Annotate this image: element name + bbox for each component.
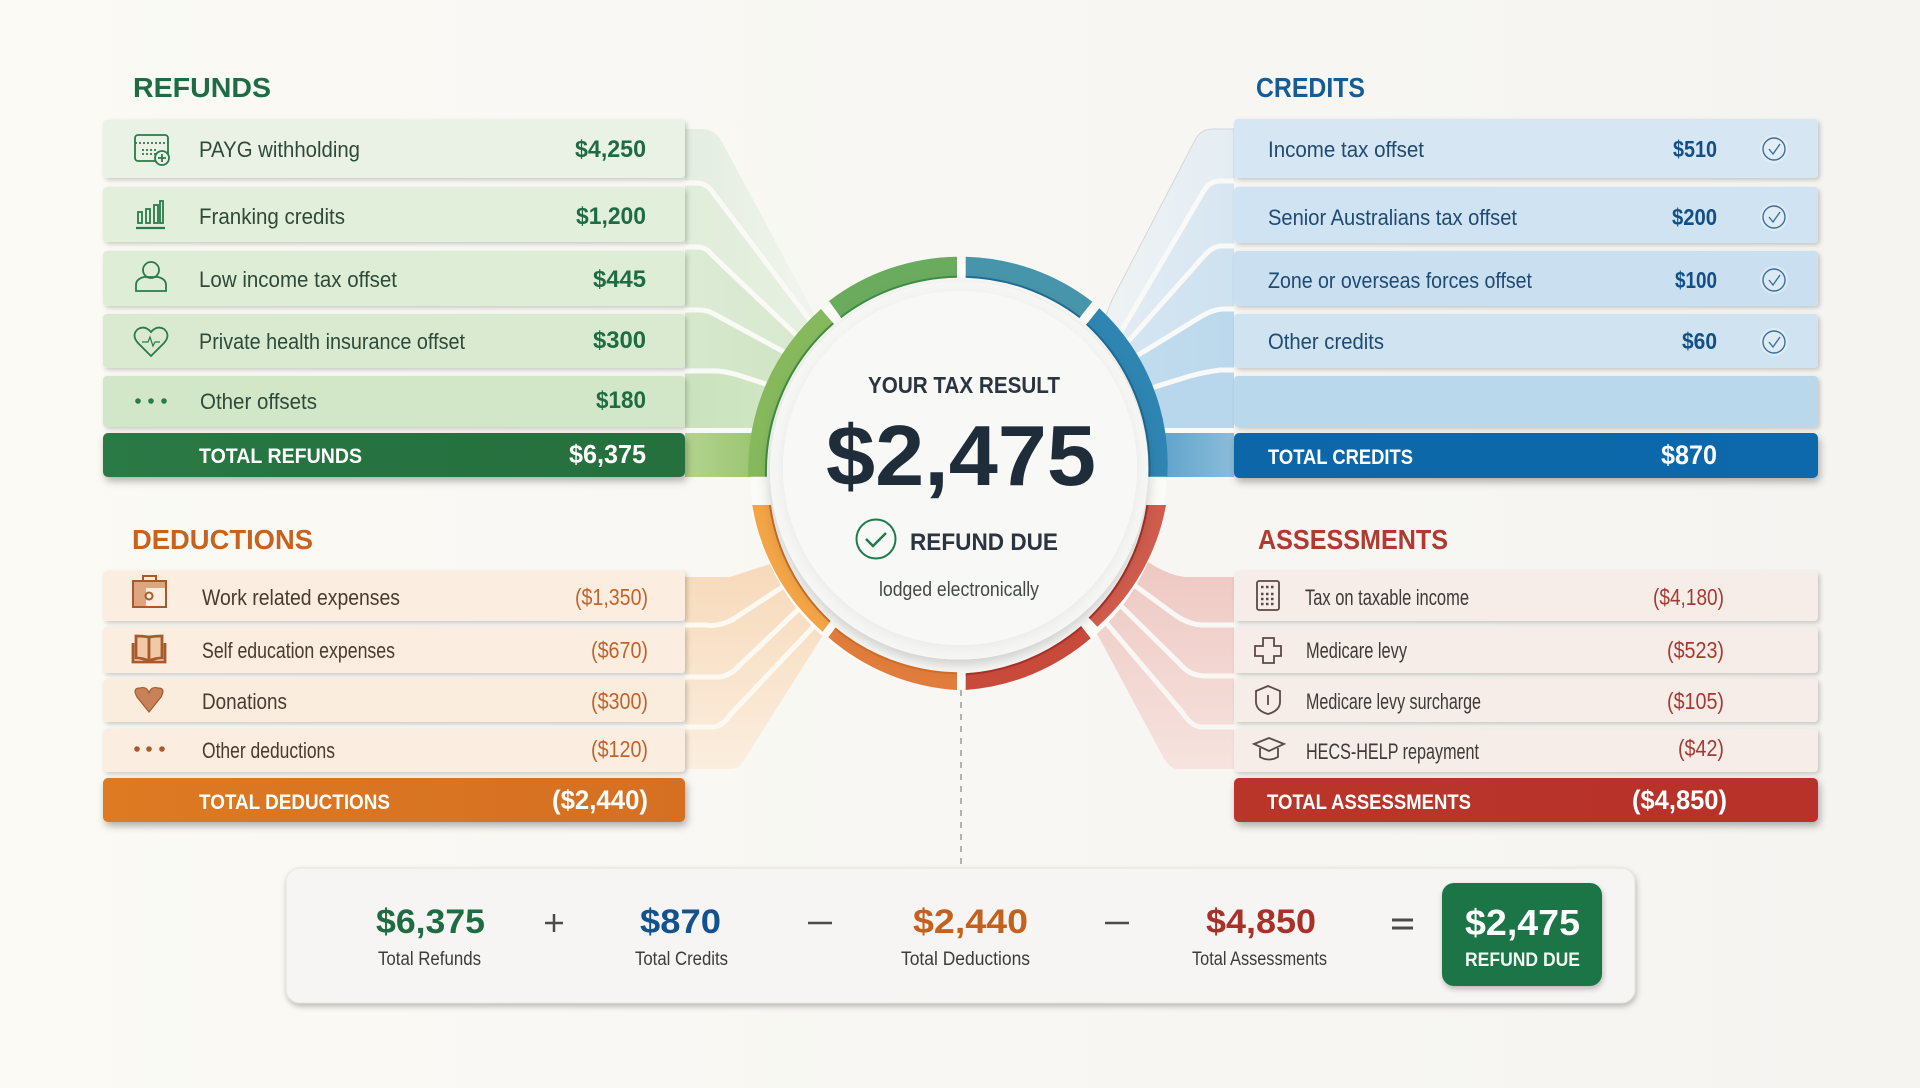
panel: central result dial: [748, 257, 1168, 690]
icon: calculator: [1257, 581, 1279, 610]
row: private health insurance offset: $300: [593, 327, 646, 354]
row: low income tax offset: Low income tax offset: [199, 267, 397, 292]
heading: credits: CREDITS: [1256, 72, 1365, 103]
row: PAYG withholding: [103, 120, 685, 178]
icon: check: [1760, 203, 1788, 231]
row: donations: ($300): [591, 688, 648, 714]
panel: credits: [1234, 72, 1818, 478]
total row: credits: $870: [1661, 440, 1717, 470]
row: private health insurance offset: [103, 314, 685, 368]
row: tax on taxable income: Tax on taxable income: [1305, 585, 1469, 610]
row: self education expenses: Self education expenses: [202, 638, 395, 663]
row: PAYG withholding: PAYG withholding: [199, 137, 360, 162]
operator: minus: [1105, 922, 1129, 924]
row: senior australians tax offset: [1234, 187, 1818, 243]
icon: check: [1760, 328, 1788, 356]
row: donations: Donations: [202, 689, 287, 714]
row: medicare levy surcharge: [1234, 679, 1818, 722]
operator: plus: [545, 914, 563, 932]
panel: refunds: [103, 72, 685, 477]
result badge: [1442, 883, 1602, 986]
row: low income tax offset: [103, 251, 685, 306]
flow ribbons: refunds: [685, 129, 815, 477]
result badge: $2,475: [1465, 902, 1580, 943]
row: other deductions: [103, 729, 685, 772]
icon: open book: [133, 636, 165, 662]
row: low income tax offset: $445: [593, 266, 646, 293]
icon: shield: [1256, 686, 1280, 714]
icon: more dots: [134, 746, 165, 752]
total row: deductions: ($2,440): [552, 785, 648, 815]
row: income tax offset: [1234, 119, 1818, 178]
flow ribbons: credits: [1104, 129, 1234, 477]
icon: check: [1760, 266, 1788, 294]
row: zone or overseas forces offset: Zone or overseas forces offset: [1268, 268, 1532, 293]
term: total assessments: Total Assessments: [1192, 949, 1327, 970]
label: your tax result: YOUR TAX RESULT: [868, 372, 1060, 398]
row: medicare levy: Medicare levy: [1306, 638, 1407, 663]
row: medicare levy surcharge: ($105): [1667, 688, 1724, 714]
row: other credits: [1234, 314, 1818, 368]
ring segments: [748, 257, 1168, 690]
row: medicare levy: [1234, 627, 1818, 673]
row: franking credits: [103, 187, 685, 242]
row: senior australians tax offset: Senior Australians tax offset: [1268, 205, 1517, 230]
panel: deductions: [103, 524, 685, 822]
term: total assessments: $4,850: [1206, 903, 1316, 941]
row: work related expenses: Work related expenses: [202, 585, 400, 610]
label: refund due: REFUND DUE: [910, 529, 1058, 556]
row: donations: [103, 679, 685, 722]
term: total assessments: [1192, 903, 1327, 970]
result badge: REFUND DUE: [1465, 950, 1580, 971]
operator: equals: [1392, 920, 1413, 928]
panel: summary equation: [286, 868, 1635, 1003]
icon: person: [136, 262, 166, 291]
row: franking credits: $1,200: [576, 203, 646, 230]
total row: deductions: TOTAL DEDUCTIONS: [199, 791, 390, 814]
row: other deductions: ($120): [591, 736, 648, 762]
row: other offsets: $180: [596, 387, 646, 414]
term: total deductions: $2,440: [913, 903, 1028, 941]
icon: check: [1760, 135, 1788, 163]
empty row: [1234, 376, 1818, 427]
term: total deductions: [901, 903, 1030, 970]
icon: check circle: [856, 520, 896, 558]
row: self education expenses: ($670): [591, 637, 648, 663]
term: total credits: $870: [640, 903, 721, 941]
heading: assessments: ASSESSMENTS: [1258, 524, 1448, 555]
row: medicare levy surcharge: Medicare levy surcharge: [1306, 689, 1481, 714]
icon: graduation cap: [1254, 738, 1284, 760]
term: total refunds: [376, 903, 485, 970]
total row: refunds: TOTAL REFUNDS: [199, 445, 362, 468]
total row: credits: TOTAL CREDITS: [1268, 446, 1413, 469]
heading: refunds: REFUNDS: [133, 72, 271, 103]
total row: assessments: [1234, 778, 1818, 822]
icon: medical cross: [1255, 638, 1281, 663]
icon: more dots: [135, 398, 167, 404]
total row: refunds: $6,375: [569, 439, 646, 469]
row: HECS-HELP repayment: HECS-HELP repayment: [1306, 739, 1479, 764]
row: franking credits: Franking credits: [199, 204, 345, 229]
total row: deductions: [103, 778, 685, 822]
total row: assessments: ($4,850): [1632, 785, 1727, 815]
heading: deductions: DEDUCTIONS: [132, 524, 313, 555]
total row: refunds: [103, 433, 685, 477]
row: other deductions: Other deductions: [202, 738, 335, 763]
row: work related expenses: [103, 571, 685, 621]
row: private health insurance offset: Private health insurance offset: [199, 329, 465, 354]
icon: bar chart: [136, 201, 165, 228]
icon: briefcase: [133, 576, 166, 607]
row: zone or overseas forces offset: [1234, 251, 1818, 306]
flow ribbons: assessments: [1095, 550, 1234, 769]
row: self education expenses: [103, 627, 685, 673]
total row: credits: [1234, 433, 1818, 478]
row: other offsets: [103, 376, 685, 427]
icon: payment card: [135, 135, 169, 165]
term: total deductions: Total Deductions: [901, 949, 1030, 970]
row: zone or overseas forces offset: $100: [1675, 267, 1717, 293]
row: other credits: $60: [1682, 328, 1717, 354]
row: tax on taxable income: ($4,180): [1653, 584, 1724, 610]
total row: assessments: TOTAL ASSESSMENTS: [1267, 791, 1471, 814]
icon: heart: [135, 688, 163, 712]
row: work related expenses: ($1,350): [575, 584, 648, 610]
row: senior australians tax offset: $200: [1672, 204, 1717, 230]
term: total refunds: Total Refunds: [378, 949, 481, 970]
operator: minus: [808, 922, 832, 924]
row: tax on taxable income: [1234, 571, 1818, 621]
icon: heart with pulse: [134, 328, 168, 356]
row: other offsets: Other offsets: [200, 389, 317, 414]
row: HECS-HELP repayment: ($42): [1678, 735, 1724, 761]
row: other credits: Other credits: [1268, 329, 1384, 354]
term: total refunds: $6,375: [376, 903, 485, 941]
row: medicare levy: ($523): [1667, 637, 1724, 663]
row: HECS-HELP repayment: [1234, 729, 1818, 772]
row: income tax offset: Income tax offset: [1268, 137, 1424, 162]
row: income tax offset: $510: [1673, 136, 1717, 162]
connector: dashed line to summary: [960, 690, 962, 868]
panel: assessments: [1234, 524, 1818, 822]
term: total credits: Total Credits: [635, 949, 728, 970]
value: refund amount: $2,475: [826, 409, 1096, 504]
flow ribbons: deductions: [685, 552, 825, 769]
note: lodged electronically: lodged electronically: [879, 579, 1039, 601]
row: PAYG withholding: $4,250: [575, 136, 646, 163]
term: total credits: [635, 903, 728, 970]
